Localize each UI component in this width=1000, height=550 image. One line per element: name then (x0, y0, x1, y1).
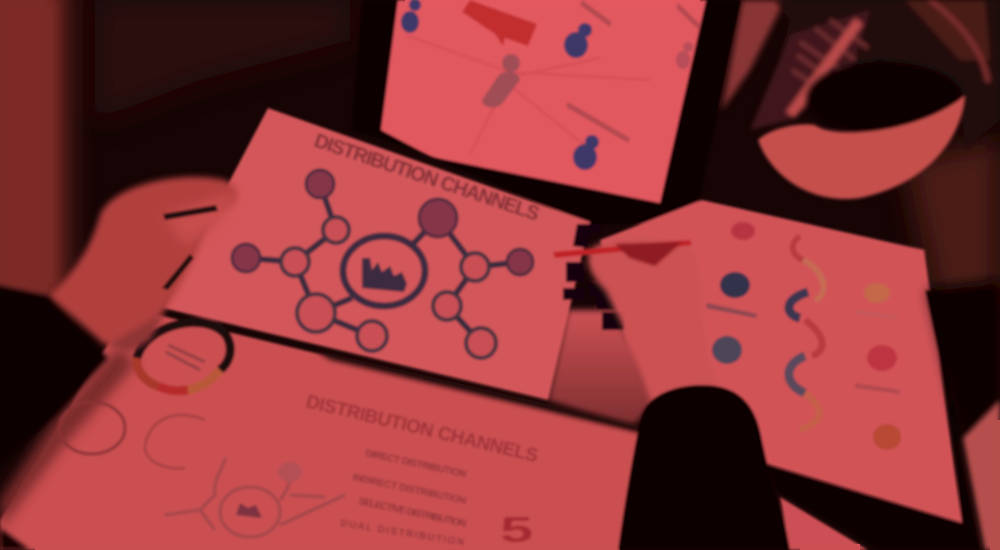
person bottom (573, 135, 599, 170)
ring chart (137, 323, 230, 391)
tablet screen (381, 0, 706, 203)
right hand (588, 238, 722, 400)
shaded paper edge (0, 345, 135, 530)
pot (758, 95, 965, 199)
screen labels (566, 0, 700, 143)
right-side dark gap (928, 280, 1000, 440)
main paper (163, 108, 590, 400)
central hub (343, 236, 425, 306)
central person (482, 54, 520, 107)
faded network (165, 458, 345, 537)
left hand (50, 177, 238, 352)
person right edge (676, 42, 693, 69)
outlined nodes (281, 217, 496, 358)
soil (807, 62, 963, 134)
red pen (553, 240, 692, 266)
main paper shadow line (315, 350, 640, 433)
tablet (352, 0, 742, 224)
network links (246, 184, 520, 343)
screen connector lines (405, 35, 650, 155)
channel list: INDIRECT DISTRIBUTION (351, 472, 467, 507)
background: dark table (0, 0, 1000, 350)
channel list: DIRECT DISTRIBUTION (364, 448, 467, 480)
person top centre (564, 23, 592, 58)
bottom-left corner dark (0, 528, 30, 550)
shadow below main paper (548, 310, 655, 428)
bottom paper title: DISTRIBUTION CHANNELS (304, 391, 540, 467)
bottom paper (0, 308, 640, 550)
channel list: DUAL DISTRIBUTION (340, 518, 465, 549)
right sleeve (618, 385, 792, 550)
far-right light paper (963, 400, 1000, 550)
lower-right tablet edge (768, 290, 980, 550)
dots and curved path (706, 222, 901, 450)
right paper (600, 200, 962, 523)
lower paper corner (780, 497, 868, 550)
outline circle (59, 402, 125, 454)
open circle (145, 415, 205, 468)
finger gaps (162, 205, 218, 290)
plant leaves (750, 0, 1000, 150)
main paper title: DISTRIBUTION CHANNELS (311, 130, 542, 226)
plant and pot (750, 0, 1000, 199)
QR code on paper (563, 224, 624, 330)
filled nodes (232, 170, 533, 275)
channel list: SELECTIVE DISTRIBUTION (357, 496, 467, 530)
left sleeve (0, 285, 108, 470)
channel list (340, 448, 467, 549)
speech bubble (462, 0, 537, 46)
big number: 5 (500, 510, 533, 550)
person top left (401, 0, 421, 33)
